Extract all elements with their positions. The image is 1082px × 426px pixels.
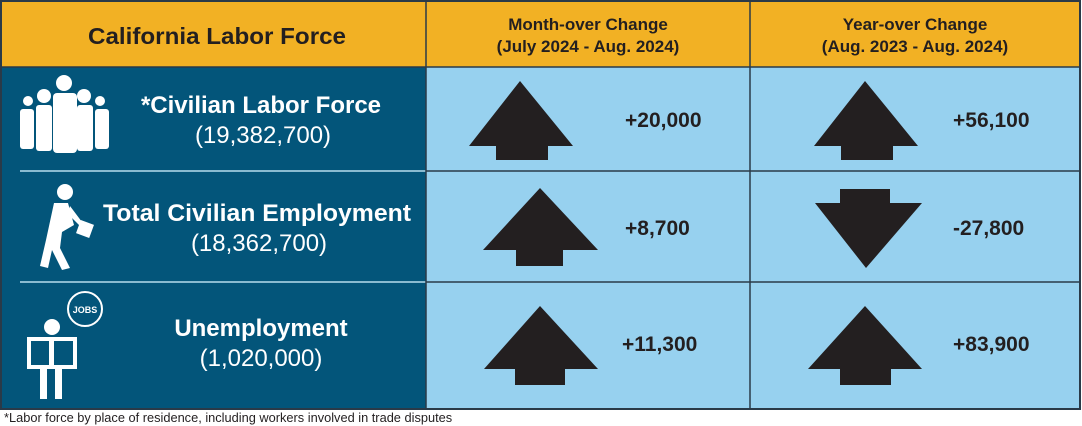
- values: +20,000: [625, 109, 702, 132]
- arrow up r2c1: [483, 188, 598, 266]
- header: month-over: Month-over Change: [508, 15, 668, 34]
- values: +11,300: [622, 333, 697, 356]
- arrow up r1c1: [469, 81, 573, 160]
- header: month-over: (July 2024 - Aug. 2024): [497, 37, 679, 56]
- arrow up r1c2: [814, 81, 918, 160]
- icon: person with newspaper: [27, 292, 102, 399]
- label: total civilian employment: Total Civilian Employment: [103, 200, 411, 227]
- label: unemployment: (1,020,000): [200, 345, 322, 372]
- right panels: [426, 67, 1080, 409]
- label: total civilian employment: (18,362,700): [191, 230, 327, 257]
- arrows: [469, 81, 922, 385]
- arrow down r2c2: [815, 189, 922, 268]
- values: -27,800: [953, 217, 1024, 240]
- icon: walking man with briefcase: [40, 184, 94, 270]
- values: +56,100: [953, 109, 1030, 132]
- header: year-over: (Aug. 2023 - Aug. 2024): [822, 37, 1008, 56]
- label: unemployment: Unemployment: [174, 315, 348, 342]
- label: civilian labor force: (19,382,700): [195, 122, 331, 149]
- values: +8,700: [625, 217, 690, 240]
- arrow up r3c2: [808, 306, 922, 385]
- label: civilian labor force: [141, 92, 381, 149]
- header row: [1, 1, 1080, 67]
- header: year-over: Year-over Change: [843, 15, 987, 34]
- icon: person with newspaper: JOBS: [73, 305, 97, 315]
- values: +83,900: [953, 333, 1030, 356]
- values: [622, 109, 1030, 356]
- title: California Labor Force: [88, 23, 346, 49]
- label: unemployment: [174, 315, 348, 372]
- footnote: *Labor force by place of residence, including workers involved in trade disputes: [4, 410, 452, 425]
- arrow up r3c1: [484, 306, 598, 385]
- label: civilian labor force: *Civilian Labor Force: [141, 92, 381, 119]
- icon: group of people: [20, 75, 109, 153]
- label: total civilian employment: [103, 200, 411, 257]
- left panel: [1, 67, 426, 409]
